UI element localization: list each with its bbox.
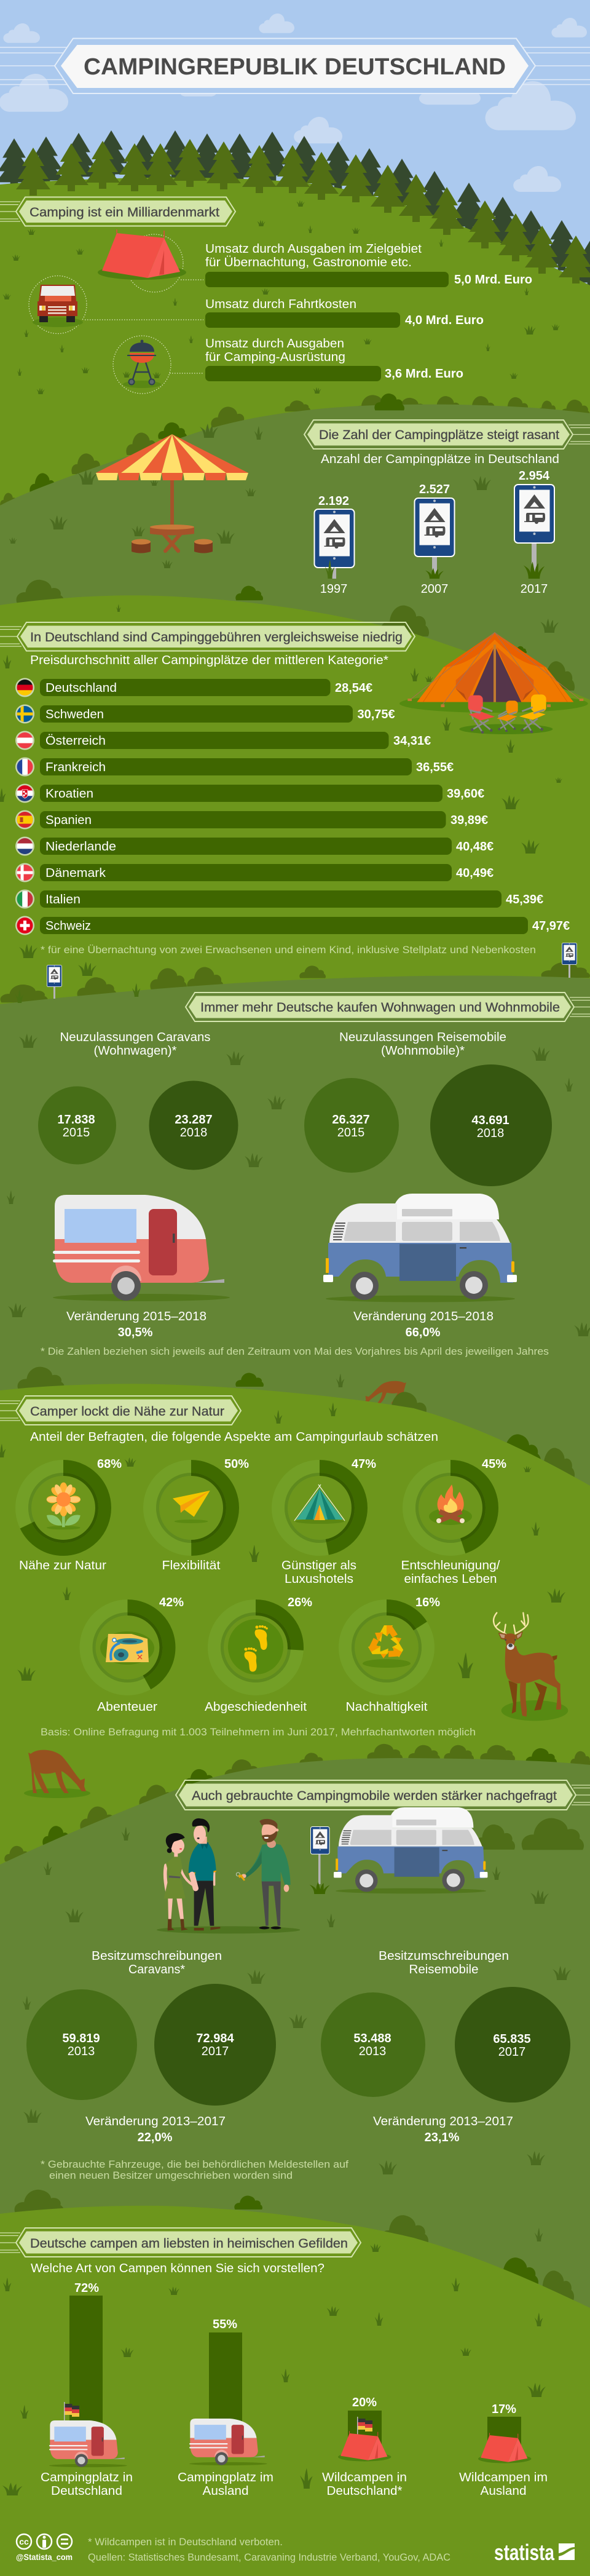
bar: Schweden: 30,75€: [358, 708, 395, 721]
change caravans: Veränderung 2013–2017: [85, 2115, 226, 2128]
bushes behind fourth hill: [1, 962, 590, 1002]
bushes behind second hill: [0, 395, 590, 507]
donut: Nachhaltigkeit: 16%: [415, 1596, 440, 1609]
bar: Deutschland: 28,54€: [335, 681, 372, 695]
subheading: motorhomes: Neuzulassungen Reisemobile: [339, 1031, 506, 1044]
icon: teal tent: [294, 1484, 345, 1524]
change caravans: Veränderung 2015–2018: [66, 1310, 206, 1323]
change caravans: [85, 2115, 226, 2144]
bar: Österreich: 34,31€: [393, 734, 431, 748]
donut: Abenteuer: [86, 1596, 184, 1714]
icon: footprints: [228, 1619, 283, 1674]
panel: camping fees by country: [0, 622, 576, 999]
donut: Nähe zur Natur: [19, 1457, 122, 1572]
column: Campingplatz in Deutschland: Deutschland: [51, 2484, 122, 2498]
title banner: [0, 38, 590, 93]
front trees: [16, 139, 590, 283]
footnote: * für eine Übernachtung von zwei Erwachsenen und einem Kind, inklusive Stellplatz und Nebenkosten: [41, 944, 536, 956]
bar chart: revenue: für Camping-Ausrüstung: [205, 351, 345, 364]
bush on hill crest: [374, 394, 404, 410]
bar: Schweiz: 47,97€: [532, 919, 570, 933]
bubble: motorhomes 2013: [321, 1992, 425, 2097]
donut: Abenteuer: Abenteuer: [97, 1700, 157, 1714]
icon: parasol with table: [96, 434, 248, 553]
subheading: caravans: (Wohnwagen)*: [93, 1044, 177, 1058]
footnote: einen neuen Besitzer umgeschrieben worden sind: [49, 2170, 293, 2181]
subheading: motorhomes: [379, 1949, 509, 1976]
bubble: motorhomes 2018: [430, 1064, 552, 1186]
statista logo: statista: [494, 2540, 555, 2565]
footnote: * Die Zahlen beziehen sich jeweils auf den Zeitraum von Mai des Vorjahres bis April des jeweiligen Jahres: [41, 1345, 549, 1357]
bar chart: revenue: 3,6 Mrd. Euro: [385, 367, 463, 381]
donut: Entschleunigung: 45%: [482, 1457, 506, 1471]
subheading: caravans: Caravans*: [128, 1963, 185, 1976]
bubble: caravans 2018: 23.287: [175, 1113, 213, 1127]
bubble: caravans 2013: 59.819: [62, 2032, 100, 2045]
illustration: stag: [494, 1613, 568, 1721]
small sign right: [562, 943, 576, 978]
bar chart: revenue: Umsatz durch Ausgaben im Zielgebiet: [205, 242, 422, 256]
bar chart: revenue: Umsatz durch Ausgaben: [205, 337, 344, 351]
column: Wildcampen in Deutschland: [322, 2396, 407, 2498]
subheading: motorhomes: [339, 1031, 506, 1058]
dark back trees: [0, 130, 590, 289]
donut: Abgeschiedenheit: [205, 1596, 312, 1714]
donut: Entschleunigung: [401, 1457, 506, 1586]
bar: Italien: Italien: [45, 893, 81, 906]
bushes behind van: [474, 1818, 584, 1850]
footnote: [41, 2158, 348, 2181]
bubble: caravans 2015: [38, 1086, 116, 1165]
donut: Abgeschiedenheit: 26%: [288, 1596, 312, 1609]
subheading: caravans: [60, 1031, 210, 1058]
heading: used vehicles: [176, 1780, 590, 1810]
change caravans: [66, 1310, 206, 1339]
sign 2017: [514, 469, 554, 596]
heading: used vehicles: Auch gebrauchte Campingmobile werden stärker nachgefragt: [192, 1789, 557, 1803]
column: Wildcampen im Ausland: 17%: [492, 2403, 516, 2416]
sign 2017: 2017: [521, 582, 548, 596]
bubble: motorhomes 2017: 65.835: [493, 2032, 531, 2046]
icon: paper plane: [173, 1491, 210, 1523]
change motorhomes: 23,1%: [425, 2131, 460, 2144]
change motorhomes: [373, 2115, 513, 2144]
panel: used vehicles: [26, 1780, 590, 2181]
bar: Niederlande: Niederlande: [45, 840, 116, 854]
donut: Flexibilität: [150, 1457, 249, 1572]
change caravans: 22,0%: [138, 2131, 173, 2144]
change motorhomes: Veränderung 2013–2017: [373, 2115, 513, 2128]
column: Campingplatz im Ausland: Campingplatz im: [178, 2471, 273, 2484]
icons: creative commons: [17, 2534, 72, 2549]
donut: Flexibilität: Flexibilität: [162, 1559, 221, 1572]
footnote: * Gebrauchte Fahrzeuge, die bei behördlichen Meldestellen auf: [41, 2158, 348, 2170]
icon: red tent: [98, 229, 203, 292]
subheading: caravans: Neuzulassungen Caravans: [60, 1031, 210, 1044]
icon: car: [29, 275, 203, 333]
icon: campfire: [429, 1484, 472, 1525]
bar: Schweiz: [15, 916, 570, 935]
panel: camping market: [0, 197, 532, 394]
bar: Kroatien: 39,60€: [447, 787, 484, 801]
bubble: motorhomes 2017: 2017: [498, 2045, 525, 2059]
sources: * Wildcampen ist in Deutschland verboten.: [88, 2536, 283, 2548]
bubble: motorhomes 2015: 2015: [337, 1126, 364, 1139]
bar: Dänemark: 40,49€: [456, 866, 494, 880]
column: Campingplatz in Deutschland: 72%: [74, 2281, 99, 2295]
bar: Spanien: Spanien: [45, 814, 92, 827]
bar: Italien: 45,39€: [506, 893, 543, 906]
subheading: motorhomes: Besitzumschreibungen: [379, 1949, 509, 1963]
grass tufts on dark meadows: [7, 424, 590, 2241]
heading: camping preferences: Deutsche campen am liebsten in heimischen Gefilden: [30, 2237, 348, 2251]
donut: Entschleunigung: einfaches Leben: [404, 1572, 497, 1586]
column: Wildcampen im Ausland: Wildcampen im: [459, 2471, 548, 2484]
donut: Günstiger als Luxushotels: [278, 1457, 376, 1586]
bushes behind third hill: [17, 580, 575, 691]
bubble: caravans 2017: 72.984: [196, 2032, 234, 2045]
bushes behind seventh hill: [15, 2190, 574, 2301]
bubble: motorhomes 2017: [455, 1987, 570, 2102]
donut: Abgeschiedenheit: Abgeschiedenheit: [205, 1700, 307, 1714]
illustration: people handing over keys: [157, 1818, 300, 1933]
donut: Entschleunigung: Entschleunigung/: [401, 1559, 500, 1572]
small sign left: [47, 965, 61, 999]
bar chart: revenue: 5,0 Mrd. Euro: [454, 273, 532, 287]
bar chart: revenue: 4,0 Mrd. Euro: [405, 314, 484, 327]
heading: camping market: Camping ist ein Milliardenmarkt: [30, 205, 219, 220]
bar: Schweiz: Schweiz: [45, 919, 91, 933]
sources: [88, 2536, 450, 2563]
column: Wildcampen im Ausland: Ausland: [481, 2484, 526, 2498]
illustration: camper van: [334, 1807, 487, 1893]
column: Campingplatz in Deutschland: Campingplatz in: [41, 2471, 133, 2484]
sign 1997: 2.192: [318, 494, 349, 508]
bubble: motorhomes 2013: 2013: [359, 2045, 386, 2058]
title banner: CAMPINGREPUBLIK DEUTSCHLAND: [84, 54, 506, 80]
donut: Nachhaltigkeit: [345, 1596, 440, 1714]
bubble: caravans 2013: 2013: [68, 2045, 95, 2058]
bar: Spanien: [15, 810, 488, 829]
bubble: caravans 2018: 2018: [180, 1126, 207, 1139]
icon: barbecue grill: [113, 336, 203, 394]
donut: Abenteuer: 42%: [159, 1596, 184, 1609]
subheading: motorhomes: (Wohnmobile)*: [381, 1044, 465, 1058]
column: Campingplatz in Deutschland: [41, 2281, 133, 2498]
bubble: caravans 2013: [26, 1989, 137, 2100]
illustration: camper van: [323, 1194, 517, 1302]
donut: Flexibilität: 50%: [224, 1457, 249, 1471]
illustration: orange tent with chairs: [399, 632, 588, 734]
bar: Frankreich: [15, 758, 454, 776]
bubble: motorhomes 2018: 2018: [477, 1127, 504, 1140]
change motorhomes: [353, 1310, 494, 1339]
bar: Niederlande: [15, 836, 494, 856]
column: Wildcampen im Ausland: [459, 2403, 548, 2498]
bubble: caravans 2017: 2017: [202, 2045, 229, 2058]
bar chart: revenue: Umsatz durch Fahrtkosten: [205, 298, 356, 311]
donut: Günstiger als Luxushotels: Luxushotels: [285, 1572, 353, 1586]
footnote: Basis: Online Befragung mit 1.003 Teilnehmern im Juni 2017, Mehrfachantworten möglich: [41, 1726, 476, 1738]
bushes behind fifth hill: [18, 1367, 575, 1479]
column: Wildcampen in Deutschland: Deutschland*: [327, 2484, 403, 2498]
donut: Günstiger als Luxushotels: Günstiger als: [281, 1559, 356, 1572]
donut: Nähe zur Natur: 68%: [97, 1457, 122, 1471]
heading: camping fees: [0, 622, 415, 651]
bar: Frankreich: 36,55€: [416, 761, 454, 774]
heading: camping market: [0, 197, 235, 226]
twitter handle: @Statista_com: [16, 2552, 73, 2562]
bar: Österreich: [15, 731, 431, 750]
panel: new registrations: [38, 993, 590, 1357]
bar chart: revenue: für Übernachtung, Gastronomie etc.: [205, 256, 412, 269]
bar: Kroatien: Kroatien: [45, 787, 93, 801]
sign 2007: 2.527: [419, 483, 450, 496]
bar: Dänemark: [15, 863, 494, 882]
bubble: motorhomes 2015: [304, 1078, 399, 1173]
change motorhomes: 66,0%: [406, 1326, 441, 1339]
column: Campingplatz im Ausland: Ausland: [203, 2484, 248, 2498]
donut: Günstiger als Luxushotels: 47%: [352, 1457, 376, 1471]
sign 2007: [414, 483, 455, 596]
bar chart: revenue: [205, 242, 532, 381]
illustration: grazing deer: [24, 1750, 90, 1798]
clouds: [0, 14, 587, 192]
bar: Niederlande: 40,48€: [456, 840, 494, 854]
heading: number of campsites: Die Zahl der Campingplätze steigt rasant: [319, 428, 559, 442]
bar: Italien: [15, 889, 543, 909]
donut: Nähe zur Natur: Nähe zur Natur: [19, 1559, 106, 1572]
heading: new registrations: Immer mehr Deutsche kaufen Wohnwagen und Wohnmobile: [200, 1001, 560, 1015]
sign 2017: 2.954: [519, 469, 550, 483]
bushes behind sixth hill: [4, 1744, 590, 1861]
bar: Kroatien: [15, 783, 484, 803]
donut: Nachhaltigkeit: Nachhaltigkeit: [345, 1700, 428, 1714]
bar: Spanien: 39,89€: [450, 814, 488, 827]
bubble: caravans 2018: [149, 1081, 238, 1170]
column: Campingplatz im Ausland: 55%: [213, 2318, 237, 2331]
subtitle: Preisdurchschnitt aller Campingplätze der mittleren Kategorie*: [30, 654, 388, 667]
small sign: [310, 1826, 329, 1894]
column: Wildcampen in Deutschland: 20%: [352, 2396, 377, 2409]
heading: nature: [0, 1396, 241, 1425]
sign 1997: [315, 494, 354, 596]
subtitle: Anteil der Befragten, die folgende Aspekte am Campingurlaub schätzen: [30, 1430, 438, 1444]
bubble: caravans 2017: [154, 1984, 276, 2106]
bar: Schweden: [15, 705, 395, 723]
heading: number of campsites: [304, 420, 590, 449]
icon: map: [100, 1631, 154, 1665]
icon: recycling: [363, 1625, 411, 1668]
column: Campingplatz im Ausland: [178, 2318, 273, 2498]
icon: flower: [47, 1483, 81, 1529]
subtitle: Anzahl der Campingplätze in Deutschland: [321, 453, 559, 466]
heading: camping preferences: [0, 2228, 361, 2257]
footer: [16, 2534, 575, 2565]
subheading: caravans: Besitzumschreibungen: [92, 1949, 222, 1963]
illustration: caravan: [53, 1195, 230, 1301]
icons: creative commons: cc: [19, 2537, 29, 2546]
sign 2007: 2007: [421, 582, 448, 596]
bubble: motorhomes 2013: 53.488: [353, 2032, 391, 2045]
bar: Dänemark: Dänemark: [45, 866, 106, 880]
bar: Österreich: Österreich: [45, 734, 106, 748]
heading: nature: Camper lockt die Nähe zur Natur: [30, 1405, 224, 1419]
heading: new registrations: [186, 993, 590, 1021]
bubble: caravans 2015: 17.838: [57, 1113, 95, 1127]
sign 1997: 1997: [320, 582, 347, 596]
bar: Deutschland: [15, 678, 372, 697]
subheading: caravans: [92, 1949, 222, 1976]
subheading: motorhomes: Reisemobile: [409, 1963, 478, 1976]
subtitle: Welche Art von Campen können Sie sich vorstellen?: [31, 2262, 324, 2275]
column: Wildcampen in Deutschland: Wildcampen in: [322, 2471, 407, 2484]
heading: camping fees: In Deutschland sind Campinggebühren vergleichsweise niedrig: [30, 630, 403, 644]
change caravans: 30,5%: [118, 1326, 153, 1339]
bar: Deutschland: Deutschland: [45, 681, 117, 695]
grazing deer on the hill edge: [364, 1381, 406, 1403]
bubble: motorhomes 2015: 26.327: [332, 1113, 370, 1127]
bubble: motorhomes 2018: 43.691: [471, 1114, 509, 1127]
panel: camping preferences: [0, 2228, 548, 2498]
sources: Quellen: Statistisches Bundesamt, Caravaning Industrie Verband, YouGov, ADAC: [88, 2551, 450, 2563]
change motorhomes: Veränderung 2015–2018: [353, 1310, 494, 1323]
panel: number of campsites: [304, 420, 590, 596]
bar: Schweden: Schweden: [45, 708, 104, 721]
bar: Frankreich: Frankreich: [45, 761, 106, 774]
bubble: caravans 2015: 2015: [63, 1126, 90, 1139]
panel: nature: [0, 1396, 568, 1798]
